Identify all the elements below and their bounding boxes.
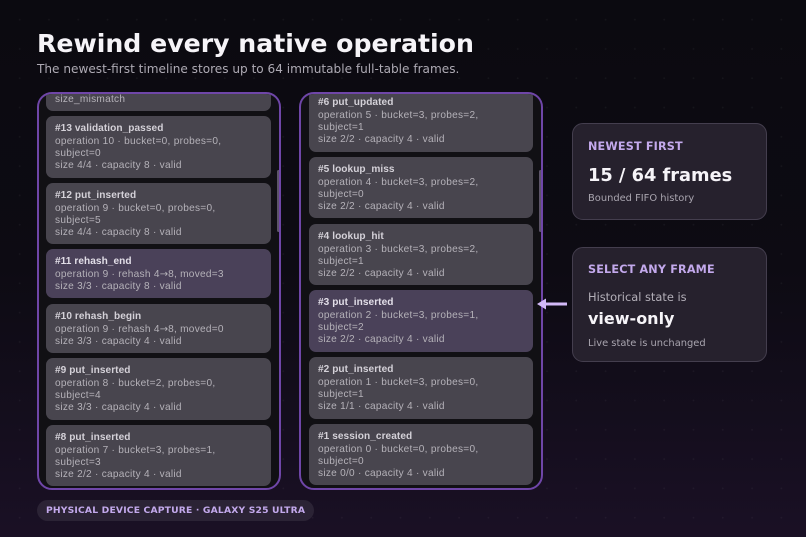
card: 5 lookup_miss: subject=0 bbox=[318, 189, 364, 200]
scrollbar left bbox=[277, 170, 280, 232]
panel: select any frame bbox=[572, 247, 767, 362]
card: 12 put_inserted: operation 9 · bucket=0, probes=0, bbox=[55, 203, 215, 214]
card: 11 rehash_end: operation 9 · rehash 4→8, moved=3 bbox=[55, 269, 224, 280]
card: 1 session_created: size 0/0 · capacity 4 · valid bbox=[318, 468, 445, 479]
card: 4 lookup_hit: operation 3 · bucket=3, probes=2, bbox=[318, 244, 478, 255]
card: size_mismatch: size_mismatch bbox=[55, 94, 125, 105]
card: 6 put_updated bbox=[309, 90, 533, 152]
card: 6 put_updated: operation 5 · bucket=3, probes=2, bbox=[318, 110, 478, 121]
panel: newest first bbox=[572, 123, 767, 220]
card: 10 rehash_begin: #10 rehash_begin bbox=[55, 311, 141, 322]
title: Rewind every native operation bbox=[37, 29, 474, 58]
card: 9 put_inserted bbox=[46, 358, 271, 420]
card: 10 rehash_begin: operation 9 · rehash 4→8, moved=0 bbox=[55, 324, 224, 335]
card: 12 put_inserted: #12 put_inserted bbox=[55, 190, 136, 201]
card: 3 put_inserted selected bbox=[309, 290, 533, 352]
footer badge: PHYSICAL DEVICE CAPTURE · GALAXY S25 ULTRA bbox=[46, 505, 305, 516]
card: 2 put_inserted bbox=[309, 357, 533, 419]
card: 10 rehash_begin: size 3/3 · capacity 4 · valid bbox=[55, 336, 182, 347]
card: 5 lookup_miss: operation 4 · bucket=3, probes=2, bbox=[318, 177, 478, 188]
card: 13 validation_passed: #13 validation_passed bbox=[55, 123, 163, 134]
card: 4 lookup_hit: subject=1 bbox=[318, 256, 364, 267]
card: 3 put_inserted selected: size 2/2 · capacity 4 · valid bbox=[318, 334, 445, 345]
card: 10 rehash_begin bbox=[46, 304, 271, 353]
scrollbar right bbox=[539, 170, 542, 232]
card: 12 put_inserted: subject=5 bbox=[55, 215, 101, 226]
note: bounded fifo: Bounded FIFO history bbox=[588, 192, 694, 204]
card: 8 put_inserted: size 2/2 · capacity 4 · valid bbox=[55, 469, 182, 480]
card: 13 validation_passed: subject=0 bbox=[55, 148, 101, 159]
card: 6 put_updated: subject=1 bbox=[318, 122, 364, 133]
label: newest first: NEWEST FIRST bbox=[588, 140, 683, 153]
text: historical state: Historical state is bbox=[588, 290, 687, 304]
panel: timeline left column bbox=[37, 92, 281, 490]
arrow: points at selected frame bbox=[537, 298, 567, 310]
card: size_mismatch bbox=[46, 54, 271, 111]
card: 4 lookup_hit bbox=[309, 224, 533, 285]
stat: frames count: 15 / 64 frames bbox=[588, 165, 732, 186]
card: 13 validation_passed: size 4/4 · capacity 8 · valid bbox=[55, 160, 182, 171]
card: 8 put_inserted: operation 7 · bucket=3, probes=1, bbox=[55, 445, 215, 456]
card: 3 put_inserted selected: subject=2 bbox=[318, 322, 364, 333]
card: 1 session_created bbox=[309, 424, 533, 485]
footer badge bbox=[37, 500, 314, 521]
subtitle: The newest-first timeline stores up to 64 immutable full-table frames. bbox=[37, 62, 459, 76]
card: 9 put_inserted: size 3/3 · capacity 4 · valid bbox=[55, 402, 182, 413]
card: 2 put_inserted: operation 1 · bucket=3, probes=0, bbox=[318, 377, 478, 388]
card: 2 put_inserted: size 1/1 · capacity 4 · valid bbox=[318, 401, 445, 412]
card: 9 put_inserted: #9 put_inserted bbox=[55, 365, 131, 376]
panel: timeline right column bbox=[299, 92, 543, 490]
card: 12 put_inserted: size 4/4 · capacity 8 · valid bbox=[55, 227, 182, 238]
card: 2 put_inserted: #2 put_inserted bbox=[318, 364, 394, 375]
card: 13 validation_passed bbox=[46, 116, 271, 178]
card: 6 put_updated: size 2/2 · capacity 4 · valid bbox=[318, 134, 445, 145]
card: 9 put_inserted: subject=4 bbox=[55, 390, 101, 401]
card: 13 validation_passed: operation 10 · bucket=0, probes=0, bbox=[55, 136, 221, 147]
card: 8 put_inserted bbox=[46, 425, 271, 486]
card: 4 lookup_hit: #4 lookup_hit bbox=[318, 231, 384, 242]
note: live state: Live state is unchanged bbox=[588, 338, 706, 349]
card: 9 put_inserted: operation 8 · bucket=2, probes=0, bbox=[55, 378, 215, 389]
text: view-only: view-only bbox=[588, 308, 674, 328]
card: 6 put_updated: #6 put_updated bbox=[318, 97, 393, 108]
card: 5 lookup_miss bbox=[309, 157, 533, 218]
card: 11 rehash_end: size 3/3 · capacity 8 · valid bbox=[55, 281, 182, 292]
card: 12 put_inserted bbox=[46, 183, 271, 244]
card: 11 rehash_end: #11 rehash_end bbox=[55, 256, 132, 267]
card: 4 lookup_hit: size 2/2 · capacity 4 · valid bbox=[318, 268, 445, 279]
card: 8 put_inserted: subject=3 bbox=[55, 457, 101, 468]
card: 3 put_inserted selected: #3 put_inserted bbox=[318, 297, 394, 308]
card: 1 session_created: operation 0 · bucket=0, probes=0, bbox=[318, 444, 478, 455]
card: 1 session_created: #1 session_created bbox=[318, 431, 412, 442]
card: 11 rehash_end bbox=[46, 249, 271, 298]
card: 5 lookup_miss: #5 lookup_miss bbox=[318, 164, 395, 175]
card: 5 lookup_miss: size 2/2 · capacity 4 · valid bbox=[318, 201, 445, 212]
label: select any frame: SELECT ANY FRAME bbox=[588, 263, 715, 276]
card: 1 session_created: subject=0 bbox=[318, 456, 364, 467]
card: 8 put_inserted: #8 put_inserted bbox=[55, 432, 131, 443]
card: 3 put_inserted selected: operation 2 · bucket=3, probes=1, bbox=[318, 310, 478, 321]
card: 2 put_inserted: subject=1 bbox=[318, 389, 364, 400]
